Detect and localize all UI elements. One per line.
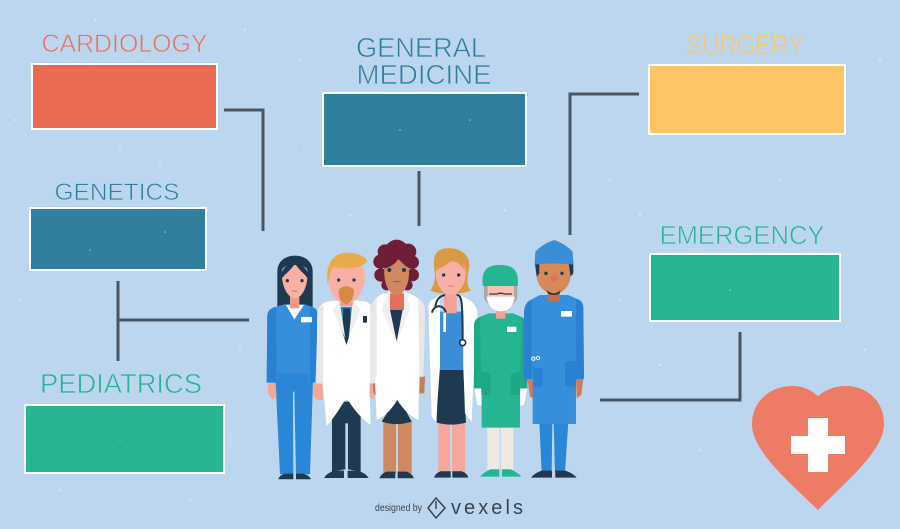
heading: general medicine: MEDICINE (356, 59, 492, 90)
doctor: surgeon in blue with cap (524, 240, 584, 478)
heading: cardiology: CARDIOLOGY (42, 30, 208, 58)
connector: genetics and pediatrics (118, 281, 249, 361)
doctor: nurse in blue scrubs (267, 256, 323, 479)
panel: cardiology (32, 64, 217, 129)
heading: genetics: GENETICS (54, 179, 180, 206)
connector: cardiology (224, 110, 263, 231)
doctor: man with beard in white coat (314, 253, 375, 478)
panel: genetics (30, 208, 206, 270)
panel: emergency (650, 254, 840, 321)
panel: pediatrics (25, 405, 224, 473)
watermark: designed by vexels: vexels (451, 497, 523, 519)
heading: general medicine (356, 32, 492, 90)
heading: emergency: EMERGENCY (660, 220, 824, 250)
connector: emergency (600, 332, 740, 400)
heading: pediatrics: PEDIATRICS (40, 368, 202, 399)
heading: surgery: SURGERY (686, 30, 804, 60)
connector: general medicine (418, 171, 420, 226)
panel: general medicine (323, 93, 526, 166)
icon: heart with cross (752, 386, 884, 510)
doctor: woman with curly hair in white coat (372, 240, 425, 478)
connector: surgery (570, 94, 639, 235)
doctor: surgeon in green with mask (474, 265, 527, 477)
heading: general medicine: GENERAL (356, 32, 486, 63)
watermark: designed by vexels (375, 497, 523, 519)
doctor: blonde woman with stethoscope (428, 248, 477, 478)
panel: surgery (649, 65, 845, 134)
watermark: designed by vexels: designed by (375, 503, 422, 514)
